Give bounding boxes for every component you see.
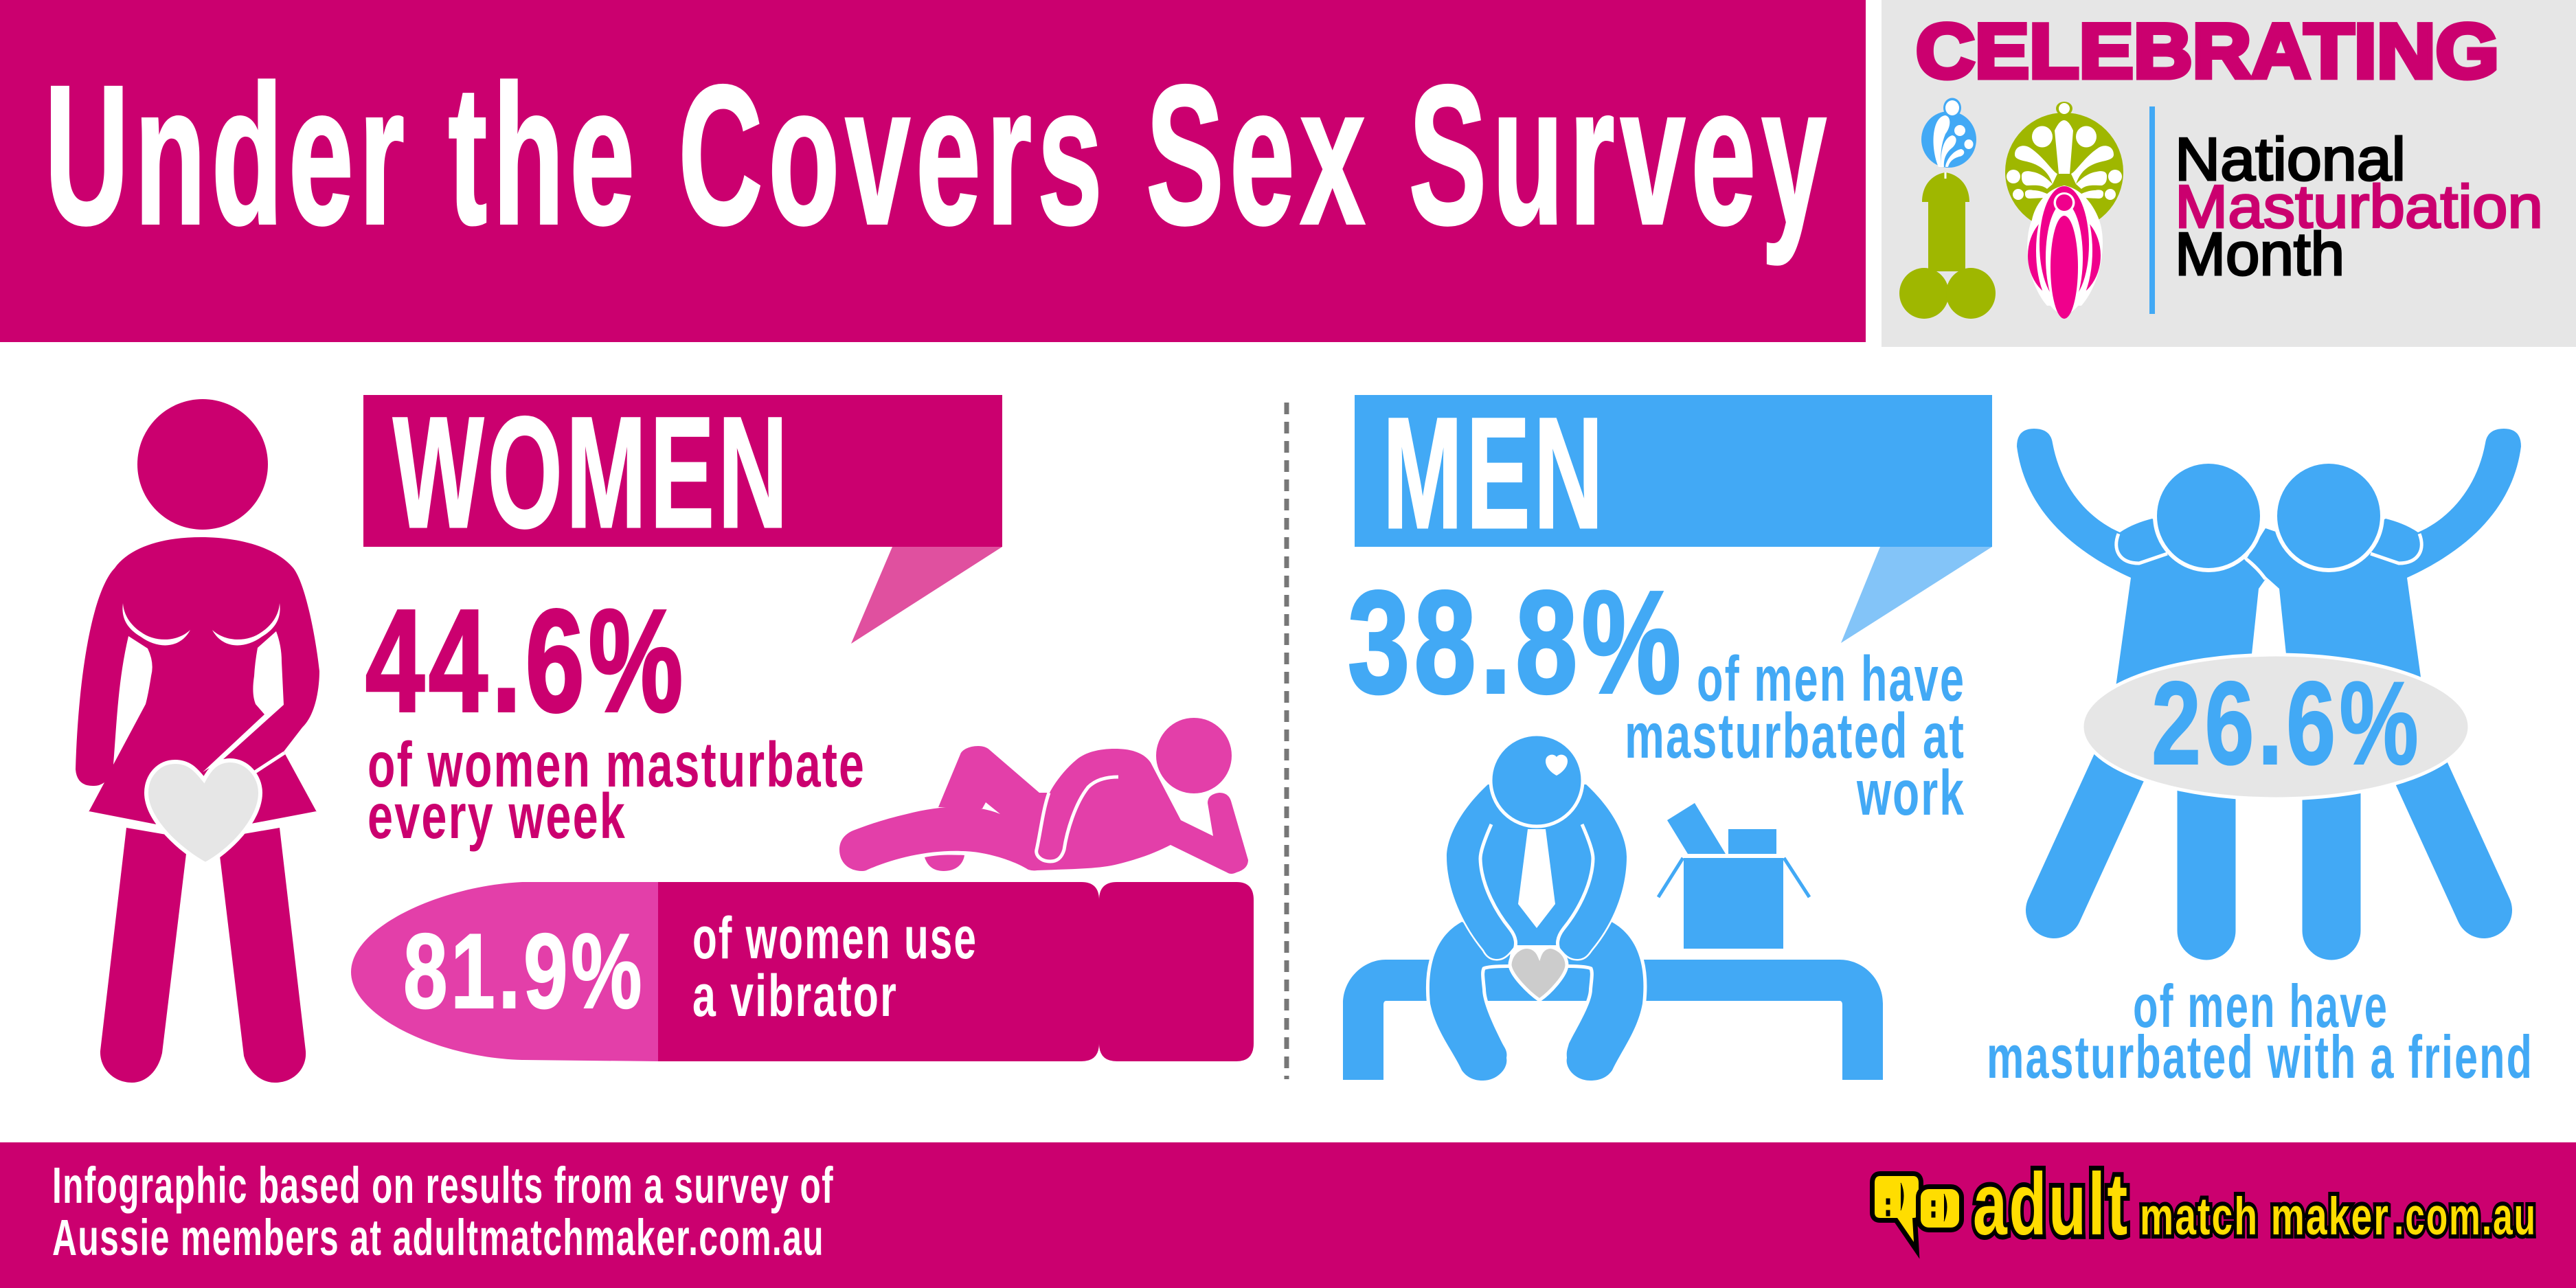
text: women use a vibrator: a vibrator bbox=[692, 963, 898, 1029]
head bbox=[2275, 462, 2382, 570]
torso and arms bbox=[1447, 784, 1627, 959]
divider bbox=[2149, 106, 2155, 314]
stat: 44.6 percent: 44.6% bbox=[365, 579, 687, 742]
icon: bench bbox=[1343, 960, 1883, 1080]
right leg bbox=[220, 828, 306, 1083]
text: women use a vibrator: of women use bbox=[692, 905, 978, 971]
ellipse with stat bbox=[2082, 655, 2470, 799]
left man bbox=[2017, 429, 2266, 687]
right man bbox=[2246, 429, 2521, 687]
panel: celebrating national masturbation month bbox=[1882, 0, 2576, 347]
footer text: Aussie members at adultmatchmaker.com.au bbox=[52, 1209, 824, 1266]
text: masturbated with a friend: of men have bbox=[2133, 972, 2388, 1040]
icon: box bbox=[1658, 803, 1809, 949]
text: women masturbate bbox=[368, 729, 866, 852]
head bbox=[2155, 462, 2262, 570]
text: national: National bbox=[2175, 125, 2406, 193]
footer text bbox=[52, 1157, 834, 1266]
stat: 38.8 percent: 38.8% bbox=[1348, 561, 1685, 723]
icon: seated man bbox=[1430, 734, 1643, 1081]
icon: speech bubbles bbox=[1875, 1176, 1959, 1242]
text: masturbated at work: masturbated at bbox=[1625, 700, 1965, 771]
icon: heart bbox=[1510, 947, 1567, 1000]
ribbon: women bbox=[363, 384, 1002, 644]
divider: dashed bbox=[1285, 403, 1289, 1079]
text: masturbated at work: work bbox=[1856, 757, 1965, 828]
icon: standing woman bbox=[76, 399, 319, 1083]
icon: penis logo bbox=[1899, 98, 1996, 319]
text: women masturbate: of women masturbate bbox=[368, 729, 866, 800]
text: masturbated with a friend bbox=[1987, 972, 2533, 1091]
tie bbox=[1518, 829, 1555, 928]
footer text: Infographic based on results from a survey of bbox=[52, 1157, 834, 1214]
heading: celebrating: CELEBRATING bbox=[1916, 8, 2499, 94]
right thigh bbox=[1563, 922, 1643, 1081]
logo: adult match maker bbox=[1875, 1155, 2537, 1254]
left thigh bbox=[1430, 922, 1511, 1081]
text: women masturbate: every week bbox=[368, 780, 626, 852]
text: masturbated at work bbox=[1625, 643, 1965, 828]
logo: adult match maker: adult bbox=[1973, 1155, 2129, 1254]
text: month: Month bbox=[2175, 220, 2345, 288]
text: masturbation: Masturbation bbox=[2175, 172, 2543, 240]
footer bbox=[0, 1142, 2576, 1288]
icon: heart bbox=[146, 760, 260, 864]
title banner bbox=[0, 0, 1866, 342]
left leg bbox=[100, 828, 186, 1083]
logo: adult match maker: match maker bbox=[2140, 1187, 2390, 1246]
icon: vibrator with stat bbox=[351, 882, 1254, 1061]
icon: small heart bbox=[1546, 755, 1568, 776]
heading: men: MEN bbox=[1383, 385, 1607, 561]
stat: 81.9 percent: 81.9% bbox=[403, 912, 645, 1030]
icon: vulva logo bbox=[2005, 102, 2123, 319]
text: masturbated at work: of men have bbox=[1697, 643, 1965, 714]
icon: two men bbox=[2017, 429, 2521, 931]
ribbon: men bbox=[1355, 385, 1992, 643]
text: women use a vibrator bbox=[692, 905, 978, 1029]
ellipse with stat: 26.6% bbox=[2151, 657, 2422, 789]
icon: lying woman bbox=[839, 718, 1248, 874]
heading: women: WOMEN bbox=[393, 384, 791, 561]
